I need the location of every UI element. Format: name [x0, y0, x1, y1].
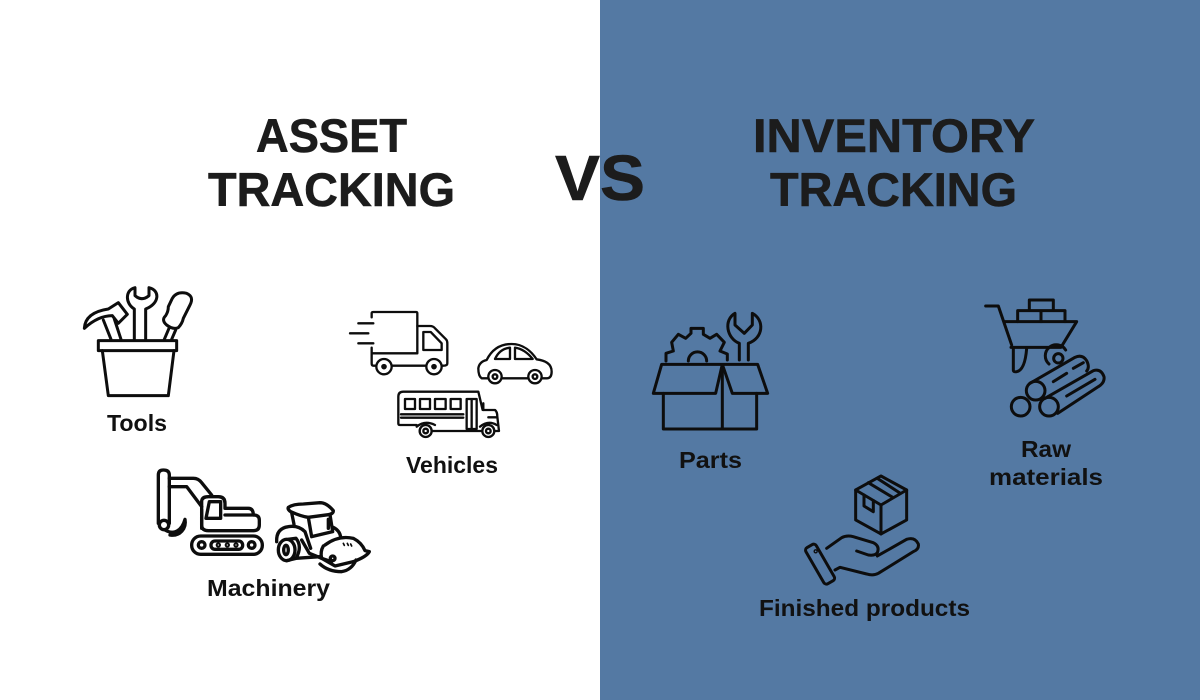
label: raw materials: Raw	[1021, 436, 1071, 462]
label: machinery: Machinery	[207, 575, 330, 601]
icon: hand holding box	[804, 476, 918, 585]
icon: wheelbarrow	[986, 300, 1077, 372]
icon: logs	[1011, 356, 1104, 416]
icon: car	[478, 344, 552, 383]
panel: asset tracking background	[0, 0, 600, 700]
icon: bus	[398, 392, 499, 437]
label: vehicles: Vehicles	[406, 452, 498, 478]
heading: inventory tracking: TRACKING	[770, 163, 1017, 216]
heading: asset tracking	[208, 109, 455, 216]
panel: inventory tracking background	[600, 0, 1200, 700]
icon: vehicles	[350, 312, 552, 437]
icon: truck	[350, 312, 447, 374]
label: raw materials: materials	[989, 464, 1103, 490]
heading: inventory tracking	[753, 109, 1035, 216]
label: parts: Parts	[679, 447, 742, 473]
label: raw materials	[989, 436, 1103, 490]
icon: machinery	[158, 470, 369, 572]
heading: inventory tracking: INVENTORY	[753, 109, 1035, 162]
icon: parts box	[653, 313, 768, 429]
heading: VS: VS	[555, 142, 645, 214]
icon: excavator	[158, 470, 262, 554]
heading: asset tracking: TRACKING	[208, 163, 455, 216]
icon: tools in bucket	[84, 288, 192, 396]
icon: raw materials	[986, 300, 1104, 416]
label: tools: Tools	[107, 410, 167, 436]
heading: asset tracking: ASSET	[256, 109, 407, 162]
label: finished products: Finished products	[759, 595, 970, 621]
icon: road roller	[277, 503, 369, 572]
